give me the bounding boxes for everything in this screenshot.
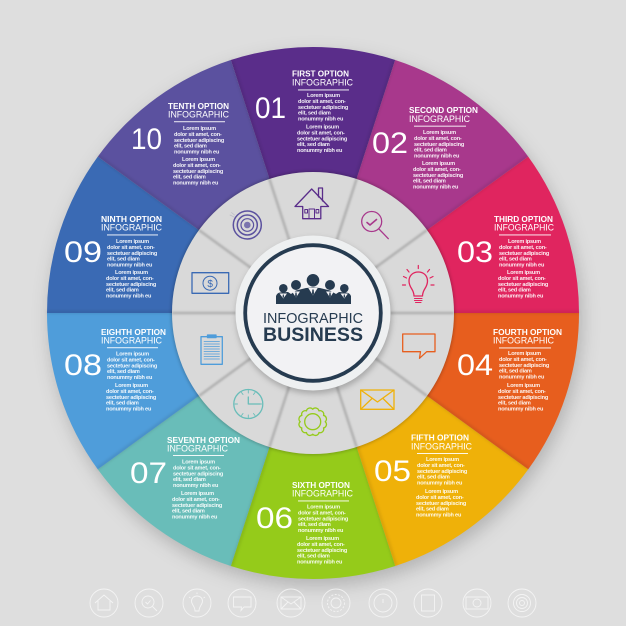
heading: ninth option xyxy=(101,214,163,235)
body text: dolor sit amet, con- xyxy=(413,167,461,173)
body text: sectetuer adipiscing xyxy=(106,282,157,288)
body text: elit, sed diam xyxy=(498,288,531,294)
heading: eighth option: EIGHTH OPTION xyxy=(101,327,166,337)
mini icon: speech bubble xyxy=(228,589,256,617)
body text: Lorem ipsum xyxy=(507,383,540,389)
body text: Lorem ipsum xyxy=(182,157,215,163)
mini icon: magnifier xyxy=(135,589,163,617)
body text: elit, sed diam xyxy=(107,369,140,375)
body text: dolor sit amet, con- xyxy=(107,357,155,363)
panel: second option xyxy=(372,105,478,191)
icon: speech bubble xyxy=(403,334,435,358)
body text: Lorem ipsum xyxy=(508,239,541,245)
icon: gear xyxy=(299,408,326,435)
heading: second option xyxy=(409,105,478,127)
panel: seventh option xyxy=(130,435,240,521)
circle drop shadow xyxy=(50,54,582,586)
body text: Lorem ipsum xyxy=(307,93,340,99)
heading: seventh option: SEVENTH OPTION xyxy=(167,435,240,445)
body text: Lorem ipsum xyxy=(115,270,148,276)
body text: dolor sit amet, con- xyxy=(297,130,345,136)
body text: nonummy nibh eu xyxy=(499,263,545,269)
body text: dolor sit amet, con- xyxy=(174,132,222,138)
number 08: 08 xyxy=(64,349,102,382)
body text: sectetuer adipiscing xyxy=(174,138,225,144)
body text: elit, sed diam xyxy=(298,111,331,117)
heading: third option: THIRD OPTION xyxy=(494,214,553,224)
mini icon: clock xyxy=(369,589,397,617)
mini icon: envelope xyxy=(277,589,305,617)
icon: target xyxy=(230,211,261,239)
body text: dolor sit amet, con- xyxy=(499,245,547,251)
body text: sectetuer adipiscing xyxy=(416,501,467,507)
body text: elit, sed diam xyxy=(297,142,330,148)
body text: Lorem ipsum xyxy=(425,489,458,495)
heading: seventh option: INFOGRAPHIC xyxy=(167,444,229,454)
body text: nonummy nibh eu xyxy=(499,375,545,381)
mini icon: clipboard xyxy=(414,589,442,617)
heading: ninth option: INFOGRAPHIC xyxy=(101,222,163,232)
panel: ninth option xyxy=(64,214,163,300)
body text: sectetuer adipiscing xyxy=(107,251,158,257)
number 06: 06 xyxy=(256,502,293,535)
body text: Lorem ipsum xyxy=(508,351,541,357)
body text: dolor sit amet, con- xyxy=(414,136,462,142)
heading: fifth option: INFOGRAPHIC xyxy=(411,442,473,452)
body text: dolor sit amet, con- xyxy=(498,276,546,282)
heading: third option xyxy=(494,214,555,235)
heading: second option: INFOGRAPHIC xyxy=(409,114,471,124)
centre badge xyxy=(236,236,392,394)
heading: third option: INFOGRAPHIC xyxy=(494,222,555,232)
heading: fourth option: FOURTH OPTION xyxy=(493,327,562,337)
icon: magnifier with check xyxy=(362,212,388,239)
body text: Lorem ipsum xyxy=(426,457,459,463)
body text: elit, sed diam xyxy=(414,148,447,154)
icon: clock xyxy=(234,390,263,418)
heading: eighth option: INFOGRAPHIC xyxy=(101,336,163,346)
heading: second option: SECOND OPTION xyxy=(409,105,478,115)
heading: first option xyxy=(292,68,354,90)
body text: Lorem ipsum xyxy=(306,536,339,542)
mini icon: house xyxy=(90,589,118,617)
icon: business team xyxy=(276,274,351,304)
body text: sectetuer adipiscing xyxy=(499,363,550,369)
body text: dolor sit amet, con- xyxy=(297,542,345,548)
body text: sectetuer adipiscing xyxy=(172,503,223,509)
body text: Lorem ipsum xyxy=(182,460,215,466)
icon: clipboard xyxy=(201,335,222,364)
body text: elit, sed diam xyxy=(499,369,532,375)
body text: Lorem ipsum xyxy=(181,491,214,497)
panel: sixth option xyxy=(256,480,354,566)
body text: sectetuer adipiscing xyxy=(107,363,158,369)
heading: fifth option xyxy=(411,432,473,454)
body text: nonummy nibh eu xyxy=(106,294,152,300)
body text: Lorem ipsum xyxy=(422,161,455,167)
heading: tenth option xyxy=(168,101,230,122)
body text: dolor sit amet, con- xyxy=(416,495,464,501)
body text: nonummy nibh eu xyxy=(174,150,220,156)
body text: nonummy nibh eu xyxy=(416,513,462,519)
panel: fourth option xyxy=(457,327,562,413)
body text: nonummy nibh eu xyxy=(172,515,218,521)
body text: sectetuer adipiscing xyxy=(173,169,224,175)
number 05: 05 xyxy=(374,455,411,488)
body text: dolor sit amet, con- xyxy=(172,497,220,503)
heading: sixth option: SIXTH OPTION xyxy=(292,480,350,490)
body text: elit, sed diam xyxy=(106,288,139,294)
body text: elit, sed diam xyxy=(172,509,205,515)
body text: nonummy nibh eu xyxy=(297,148,343,154)
body text: sectetuer adipiscing xyxy=(498,395,549,401)
icon: envelope xyxy=(361,390,394,409)
body text: elit, sed diam xyxy=(173,477,206,483)
panel: fifth option xyxy=(374,432,473,519)
panel: third option xyxy=(457,214,555,300)
body text: nonummy nibh eu xyxy=(106,407,152,413)
heading: eighth option xyxy=(101,327,166,348)
badge title: infographic: INFOGRAPHIC xyxy=(263,311,363,327)
body text: elit, sed diam xyxy=(413,179,446,185)
gray icon disc xyxy=(171,171,455,455)
body text: elit, sed diam xyxy=(498,401,531,407)
body text: dolor sit amet, con- xyxy=(298,510,346,516)
body text: sectetuer adipiscing xyxy=(297,548,348,554)
body text: elit, sed diam xyxy=(174,144,207,150)
body text: elit, sed diam xyxy=(106,401,139,407)
mini icon: banknote xyxy=(463,589,491,617)
number 01: 01 xyxy=(255,92,286,125)
number 09: 09 xyxy=(64,236,102,269)
body text: dolor sit amet, con- xyxy=(173,163,221,169)
body text: nonummy nibh eu xyxy=(498,407,544,413)
body text: dolor sit amet, con- xyxy=(417,463,465,469)
body text: sectetuer adipiscing xyxy=(499,251,550,257)
body text: sectetuer adipiscing xyxy=(498,282,549,288)
body text: dolor sit amet, con- xyxy=(498,389,546,395)
number 03: 03 xyxy=(457,236,493,269)
panel: first option xyxy=(255,68,354,154)
body text: Lorem ipsum xyxy=(115,383,148,389)
icon: dollar sign: $ xyxy=(207,279,213,290)
icon: light bulb xyxy=(402,266,434,302)
body text: dolor sit amet, con- xyxy=(298,99,346,105)
body text: dolor sit amet, con- xyxy=(499,357,547,363)
panel: eighth option xyxy=(64,327,166,413)
body text: elit, sed diam xyxy=(298,522,331,528)
body text: elit, sed diam xyxy=(416,507,449,513)
body text: dolor sit amet, con- xyxy=(173,465,221,471)
body text: Lorem ipsum xyxy=(183,126,216,132)
body text: sectetuer adipiscing xyxy=(414,142,465,148)
body text: nonummy nibh eu xyxy=(298,528,344,534)
body text: Lorem ipsum xyxy=(116,239,149,245)
body text: sectetuer adipiscing xyxy=(173,471,224,477)
heading: fourth option xyxy=(493,327,562,348)
heading: fifth option: FIFTH OPTION xyxy=(411,432,469,442)
body text: elit, sed diam xyxy=(499,257,532,263)
body text: sectetuer adipiscing xyxy=(106,395,157,401)
mini icon: bulb xyxy=(183,589,211,617)
body text: elit, sed diam xyxy=(107,257,140,263)
heading: tenth option: INFOGRAPHIC xyxy=(168,110,230,120)
panel: tenth option xyxy=(131,101,230,187)
mini icon: target xyxy=(508,589,536,617)
body text: nonummy nibh eu xyxy=(298,117,344,123)
body text: sectetuer adipiscing xyxy=(298,105,349,111)
heading: tenth option: TENTH OPTION xyxy=(168,101,229,111)
mini icon: gear xyxy=(322,589,350,617)
number 07: 07 xyxy=(130,457,167,490)
body text: nonummy nibh eu xyxy=(107,263,153,269)
heading: first option: INFOGRAPHIC xyxy=(292,78,354,88)
body text: nonummy nibh eu xyxy=(414,154,460,160)
body text: sectetuer adipiscing xyxy=(417,469,468,475)
icon: house xyxy=(295,188,328,219)
body text: Lorem ipsum xyxy=(423,130,456,136)
icon: banknote xyxy=(192,273,229,293)
heading: sixth option: INFOGRAPHIC xyxy=(292,488,354,498)
body text: Lorem ipsum xyxy=(307,504,340,510)
body text: elit, sed diam xyxy=(297,554,330,560)
ring of coloured segments xyxy=(47,47,579,579)
number 04: 04 xyxy=(457,349,493,382)
number 02: 02 xyxy=(372,127,408,160)
heading: sixth option xyxy=(292,480,354,501)
number 10: 10 xyxy=(131,123,162,156)
heading: fourth option: INFOGRAPHIC xyxy=(493,336,555,346)
body text: nonummy nibh eu xyxy=(173,483,219,489)
body text: Lorem ipsum xyxy=(306,124,339,130)
body text: nonummy nibh eu xyxy=(173,181,219,187)
body text: nonummy nibh eu xyxy=(297,560,343,566)
body text: nonummy nibh eu xyxy=(107,375,153,381)
body text: dolor sit amet, con- xyxy=(107,245,155,251)
heading: ninth option: NINTH OPTION xyxy=(101,214,162,224)
heading: seventh option xyxy=(167,435,240,456)
body text: elit, sed diam xyxy=(173,175,206,181)
body text: dolor sit amet, con- xyxy=(106,389,154,395)
body text: sectetuer adipiscing xyxy=(413,173,464,179)
badge title: business: BUSINESS xyxy=(263,325,363,346)
body text: Lorem ipsum xyxy=(507,270,540,276)
body text: nonummy nibh eu xyxy=(498,294,544,300)
body text: sectetuer adipiscing xyxy=(297,136,348,142)
body text: dolor sit amet, con- xyxy=(106,276,154,282)
body text: sectetuer adipiscing xyxy=(298,516,349,522)
heading: first option: FIRST OPTION xyxy=(292,68,349,78)
body text: nonummy nibh eu xyxy=(413,185,459,191)
body text: nonummy nibh eu xyxy=(417,481,463,487)
body text: Lorem ipsum xyxy=(116,352,149,358)
bottom icon row xyxy=(90,589,536,617)
body text: elit, sed diam xyxy=(417,475,450,481)
